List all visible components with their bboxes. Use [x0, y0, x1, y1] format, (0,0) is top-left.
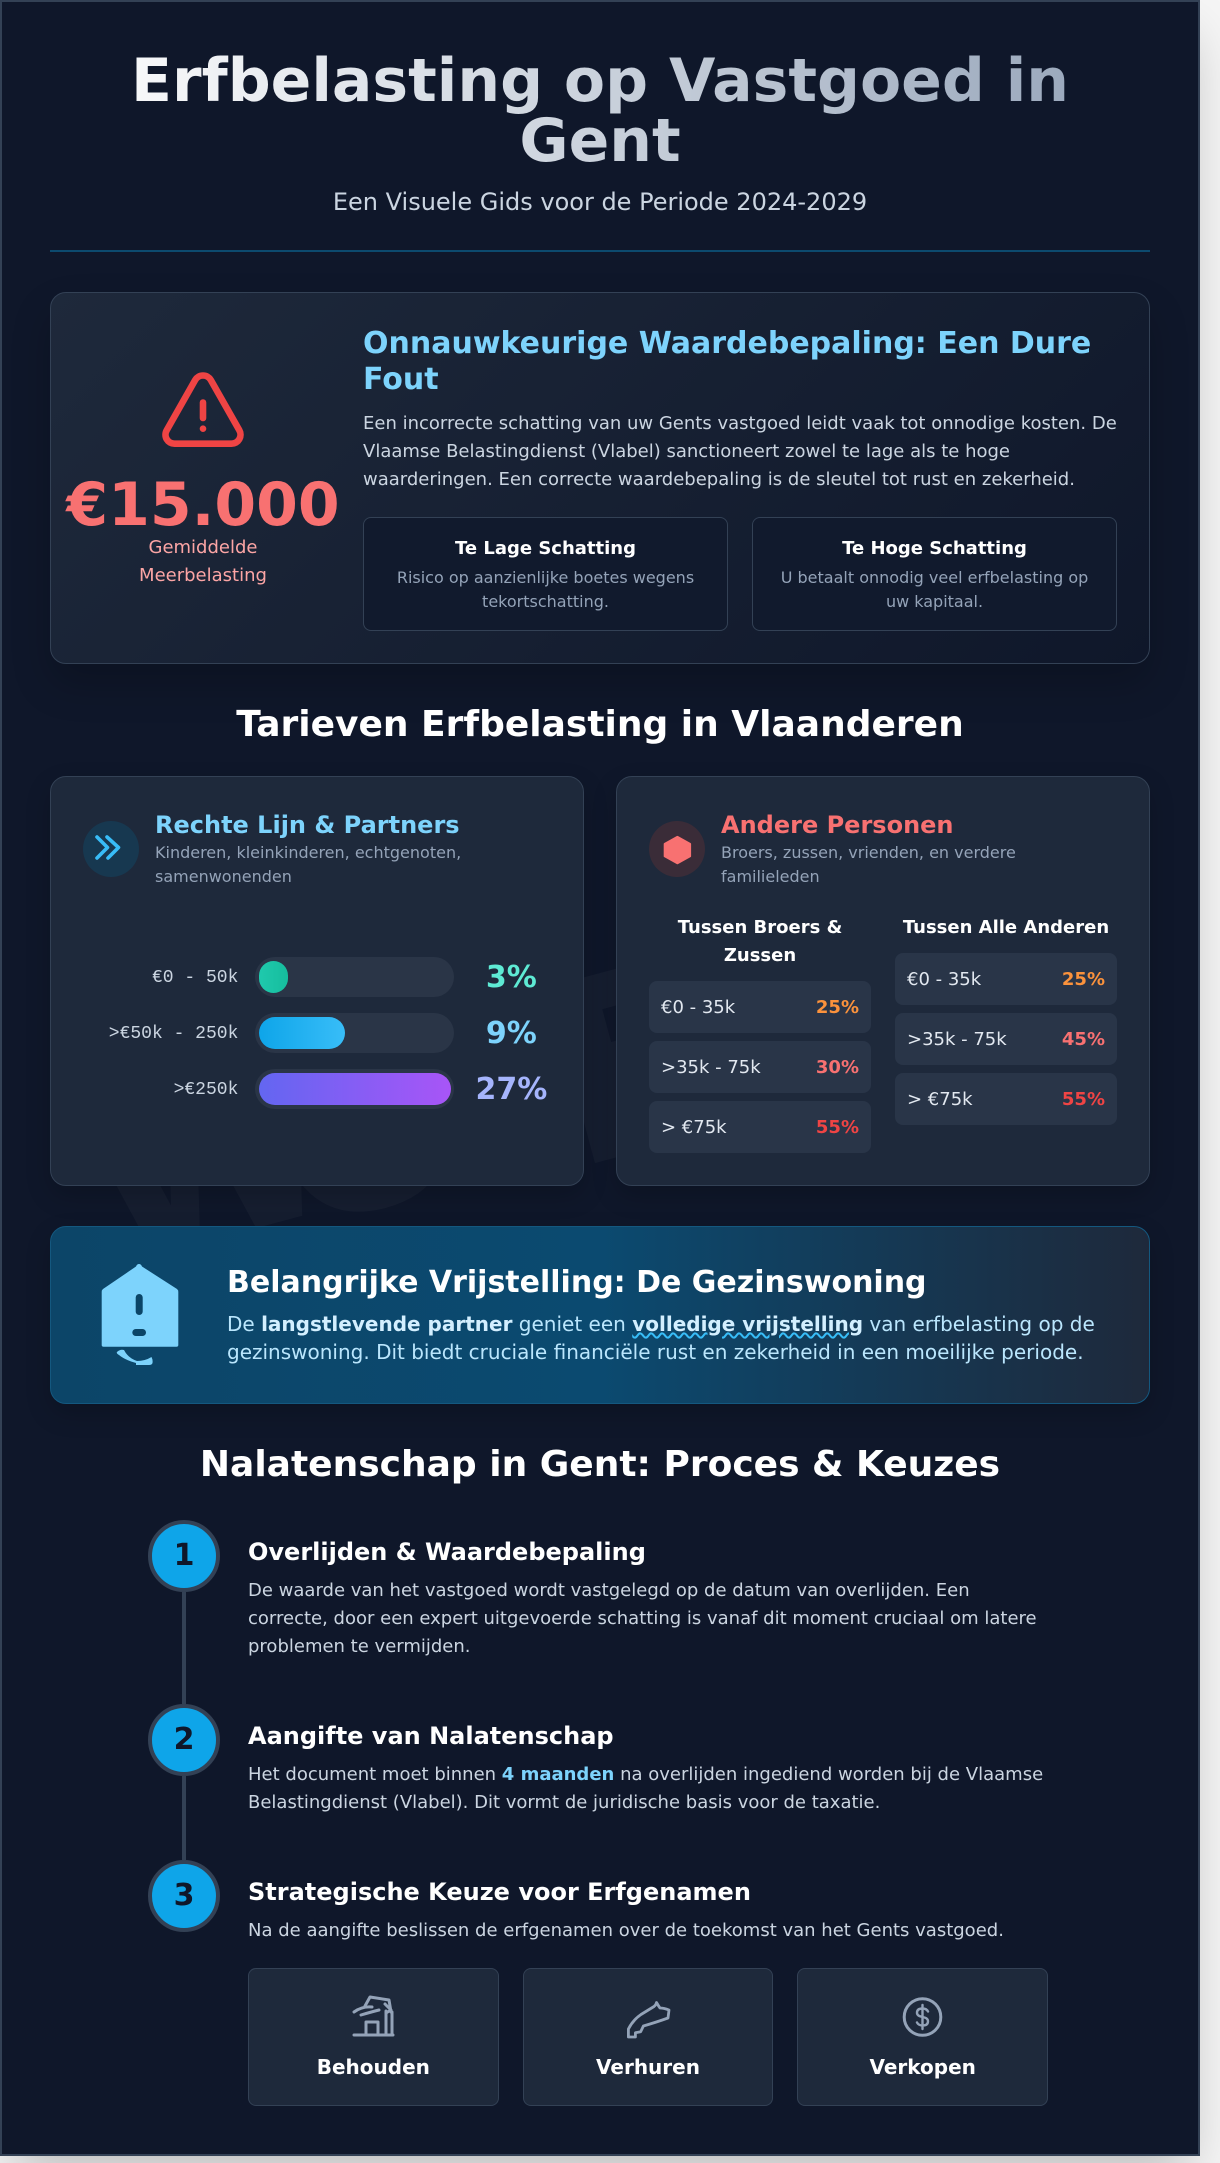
step 1	[148, 1520, 1037, 1704]
step 1 text: correcte, door een expert uitgevoerde schatting is vanaf dit moment cruciaal om latere	[248, 1608, 1037, 1629]
icon: house	[102, 1264, 178, 1365]
header title: Erfbelasting op Vastgoed in	[131, 46, 1069, 116]
card: te lage schatting: Te Lage Schatting	[455, 538, 636, 559]
table: tussen alle anderen: > €75k	[907, 1089, 973, 1110]
number caption: Meerbelasting	[139, 565, 267, 586]
header title: Gent	[519, 106, 681, 176]
header title	[50, 51, 1150, 171]
step 1 heading: Overlijden & Waardebepaling	[248, 1538, 646, 1566]
bar label 3: >€250k	[174, 1080, 238, 1100]
step 2	[148, 1704, 1043, 1860]
panel heading: Rechte Lijn & Partners	[155, 811, 460, 839]
panel subtitle	[721, 843, 1016, 886]
card: te lage schatting	[363, 517, 728, 631]
table: tussen broers en zussen: €0 - 35k	[661, 997, 735, 1018]
bar value 2: 9%	[486, 1016, 537, 1051]
step 1 text: De waarde van het vastgoed wordt vastgelegd op de datum van overlijden. Een	[248, 1580, 970, 1601]
card: te hoge schatting: Te Hoge Schatting	[842, 538, 1027, 559]
table: tussen broers en zussen	[649, 917, 871, 1153]
icon: warning triangle	[162, 372, 244, 447]
table: tussen broers en zussen: > €75k	[661, 1117, 727, 1138]
timeline	[148, 1520, 1048, 2106]
step 3 text: Na de aangifte beslissen de erfgenamen over de toekomst van het Gents vastgoed.	[248, 1920, 1004, 1941]
step number 1: 1	[174, 1538, 194, 1573]
panel subtitle: Broers, zussen, vrienden, en verdere	[721, 843, 1016, 862]
card: te hoge schatting: uw kapitaal.	[886, 592, 983, 611]
choice: verkopen: Verkopen	[869, 2055, 976, 2079]
table: tussen alle anderen	[895, 917, 1117, 1125]
icon: dollar coin	[902, 1997, 942, 2037]
table: tussen alle anderen: 45%	[1062, 1029, 1105, 1050]
panel heading: Andere Personen	[721, 811, 954, 839]
background watermark: W	[58, 1007, 359, 1317]
step 2 text	[248, 1764, 1043, 1813]
panel: andere personen	[616, 776, 1150, 1186]
subtitle: Een Visuele Gids voor de Periode 2024-2029	[333, 188, 867, 216]
table: tussen alle anderen: 25%	[1062, 969, 1105, 990]
icon: double chevron	[83, 821, 139, 877]
step number 3	[148, 1860, 220, 1932]
step 2 text: Belastingdienst (Vlabel). Dit vormt de juridische basis voor de taxatie.	[248, 1792, 880, 1813]
icon: building	[352, 1996, 394, 2036]
callout text	[227, 1312, 1095, 1364]
card: te hoge schatting: U betaalt onnodig veel erfbelasting op	[781, 568, 1088, 587]
card: te lage schatting: tekortschatting.	[482, 592, 609, 611]
panel subtitle: familieleden	[721, 867, 820, 886]
table: tussen alle anderen: 55%	[1062, 1089, 1105, 1110]
table: tussen broers en zussen: 30%	[816, 1057, 859, 1078]
panel text: waarderingen. Een correcte waardebepaling is de sleutel tot rust en zekerheid.	[363, 469, 1075, 490]
bar 3	[255, 1069, 454, 1109]
panel text	[363, 413, 1117, 490]
table: tussen alle anderen: €0 - 35k	[907, 969, 981, 990]
step 2 text: Het document moet binnen 4 maanden na overlijden ingediend worden bij de Vlaamse	[248, 1764, 1043, 1785]
panel subtitle: samenwonenden	[155, 867, 292, 886]
panel subtitle	[155, 843, 461, 886]
table: tussen broers en zussen: Zussen	[724, 945, 796, 966]
bar label 1: €0 - 50k	[152, 968, 238, 988]
table: tussen alle anderen: >35k - 75k	[907, 1029, 1007, 1050]
table: tussen broers en zussen: 25%	[816, 997, 859, 1018]
step 1 text: problemen te vermijden.	[248, 1636, 471, 1657]
choice: behouden	[248, 1968, 499, 2106]
step number 3: 3	[174, 1878, 194, 1913]
panel: rechte lijn en partners	[50, 776, 584, 1186]
heading: tarieven: Tarieven Erfbelasting in Vlaanderen	[236, 704, 964, 745]
callout: gezinswoning	[50, 1226, 1150, 1404]
step 3 heading: Strategische Keuze voor Erfgenamen	[248, 1878, 751, 1906]
heading: nalatenschap: Nalatenschap in Gent: Proces & Keuzes	[200, 1444, 1000, 1485]
icon: key	[627, 2001, 670, 2038]
big number: €15.000	[66, 470, 340, 540]
panel subtitle: Kinderen, kleinkinderen, echtgenoten,	[155, 843, 461, 862]
number caption	[139, 537, 267, 586]
table: tussen broers en zussen: Tussen Broers &	[678, 917, 842, 938]
step 2 heading: Aangifte van Nalatenschap	[248, 1722, 614, 1750]
bar 1	[255, 957, 454, 997]
number caption: Gemiddelde	[148, 537, 257, 558]
icon: hexagon	[649, 821, 705, 877]
panel heading: Fout	[363, 362, 439, 397]
background watermark: O	[242, 984, 489, 1279]
bar value 1: 3%	[486, 960, 537, 995]
bar label 2: >€50k - 250k	[109, 1024, 238, 1044]
panel text: Een incorrecte schatting van uw Gents vastgoed leidt vaak tot onnodige kosten. De	[363, 413, 1117, 434]
bar 2	[255, 1013, 454, 1053]
card: te hoge schatting	[752, 517, 1117, 631]
callout text: De langstlevende partner geniet een volledige vrijstelling van erfbelasting op de	[227, 1312, 1095, 1336]
choice: verhuren	[523, 1968, 773, 2106]
step 3	[148, 1860, 1048, 2106]
table: tussen broers en zussen: 55%	[816, 1117, 859, 1138]
panel text: Vlaamse Belastingdienst (Vlabel) sanctioneert zowel te lage als te hoge	[363, 441, 1010, 462]
panel heading: Onnauwkeurige Waardebepaling: Een Dure	[363, 326, 1091, 361]
step number 2	[148, 1704, 220, 1776]
callout text: gezinswoning. Dit biedt cruciale financiële rust en zekerheid in een moeilijke periode.	[227, 1340, 1084, 1364]
step number 1	[148, 1520, 220, 1592]
bar value 3: 27%	[475, 1072, 547, 1107]
choice: verhuren: Verhuren	[596, 2055, 700, 2079]
panel heading	[363, 326, 1091, 397]
background watermark	[0, 760, 1200, 1260]
bar chart: tarieven rechte lijn	[109, 957, 547, 1109]
background watermark: F	[513, 901, 753, 1226]
step number 2: 2	[174, 1722, 194, 1757]
panel: onnauwkeurige waardebepaling	[50, 292, 1150, 664]
choice: verkopen	[797, 1968, 1048, 2106]
table: tussen broers en zussen: >35k - 75k	[661, 1057, 761, 1078]
choice: behouden: Behouden	[317, 2055, 430, 2079]
step 1 text	[248, 1580, 1037, 1657]
card: te lage schatting: Risico op aanzienlijke boetes wegens	[397, 568, 694, 587]
table: tussen alle anderen: Tussen Alle Anderen	[903, 917, 1109, 938]
callout heading: Belangrijke Vrijstelling: De Gezinswoning	[227, 1265, 927, 1300]
